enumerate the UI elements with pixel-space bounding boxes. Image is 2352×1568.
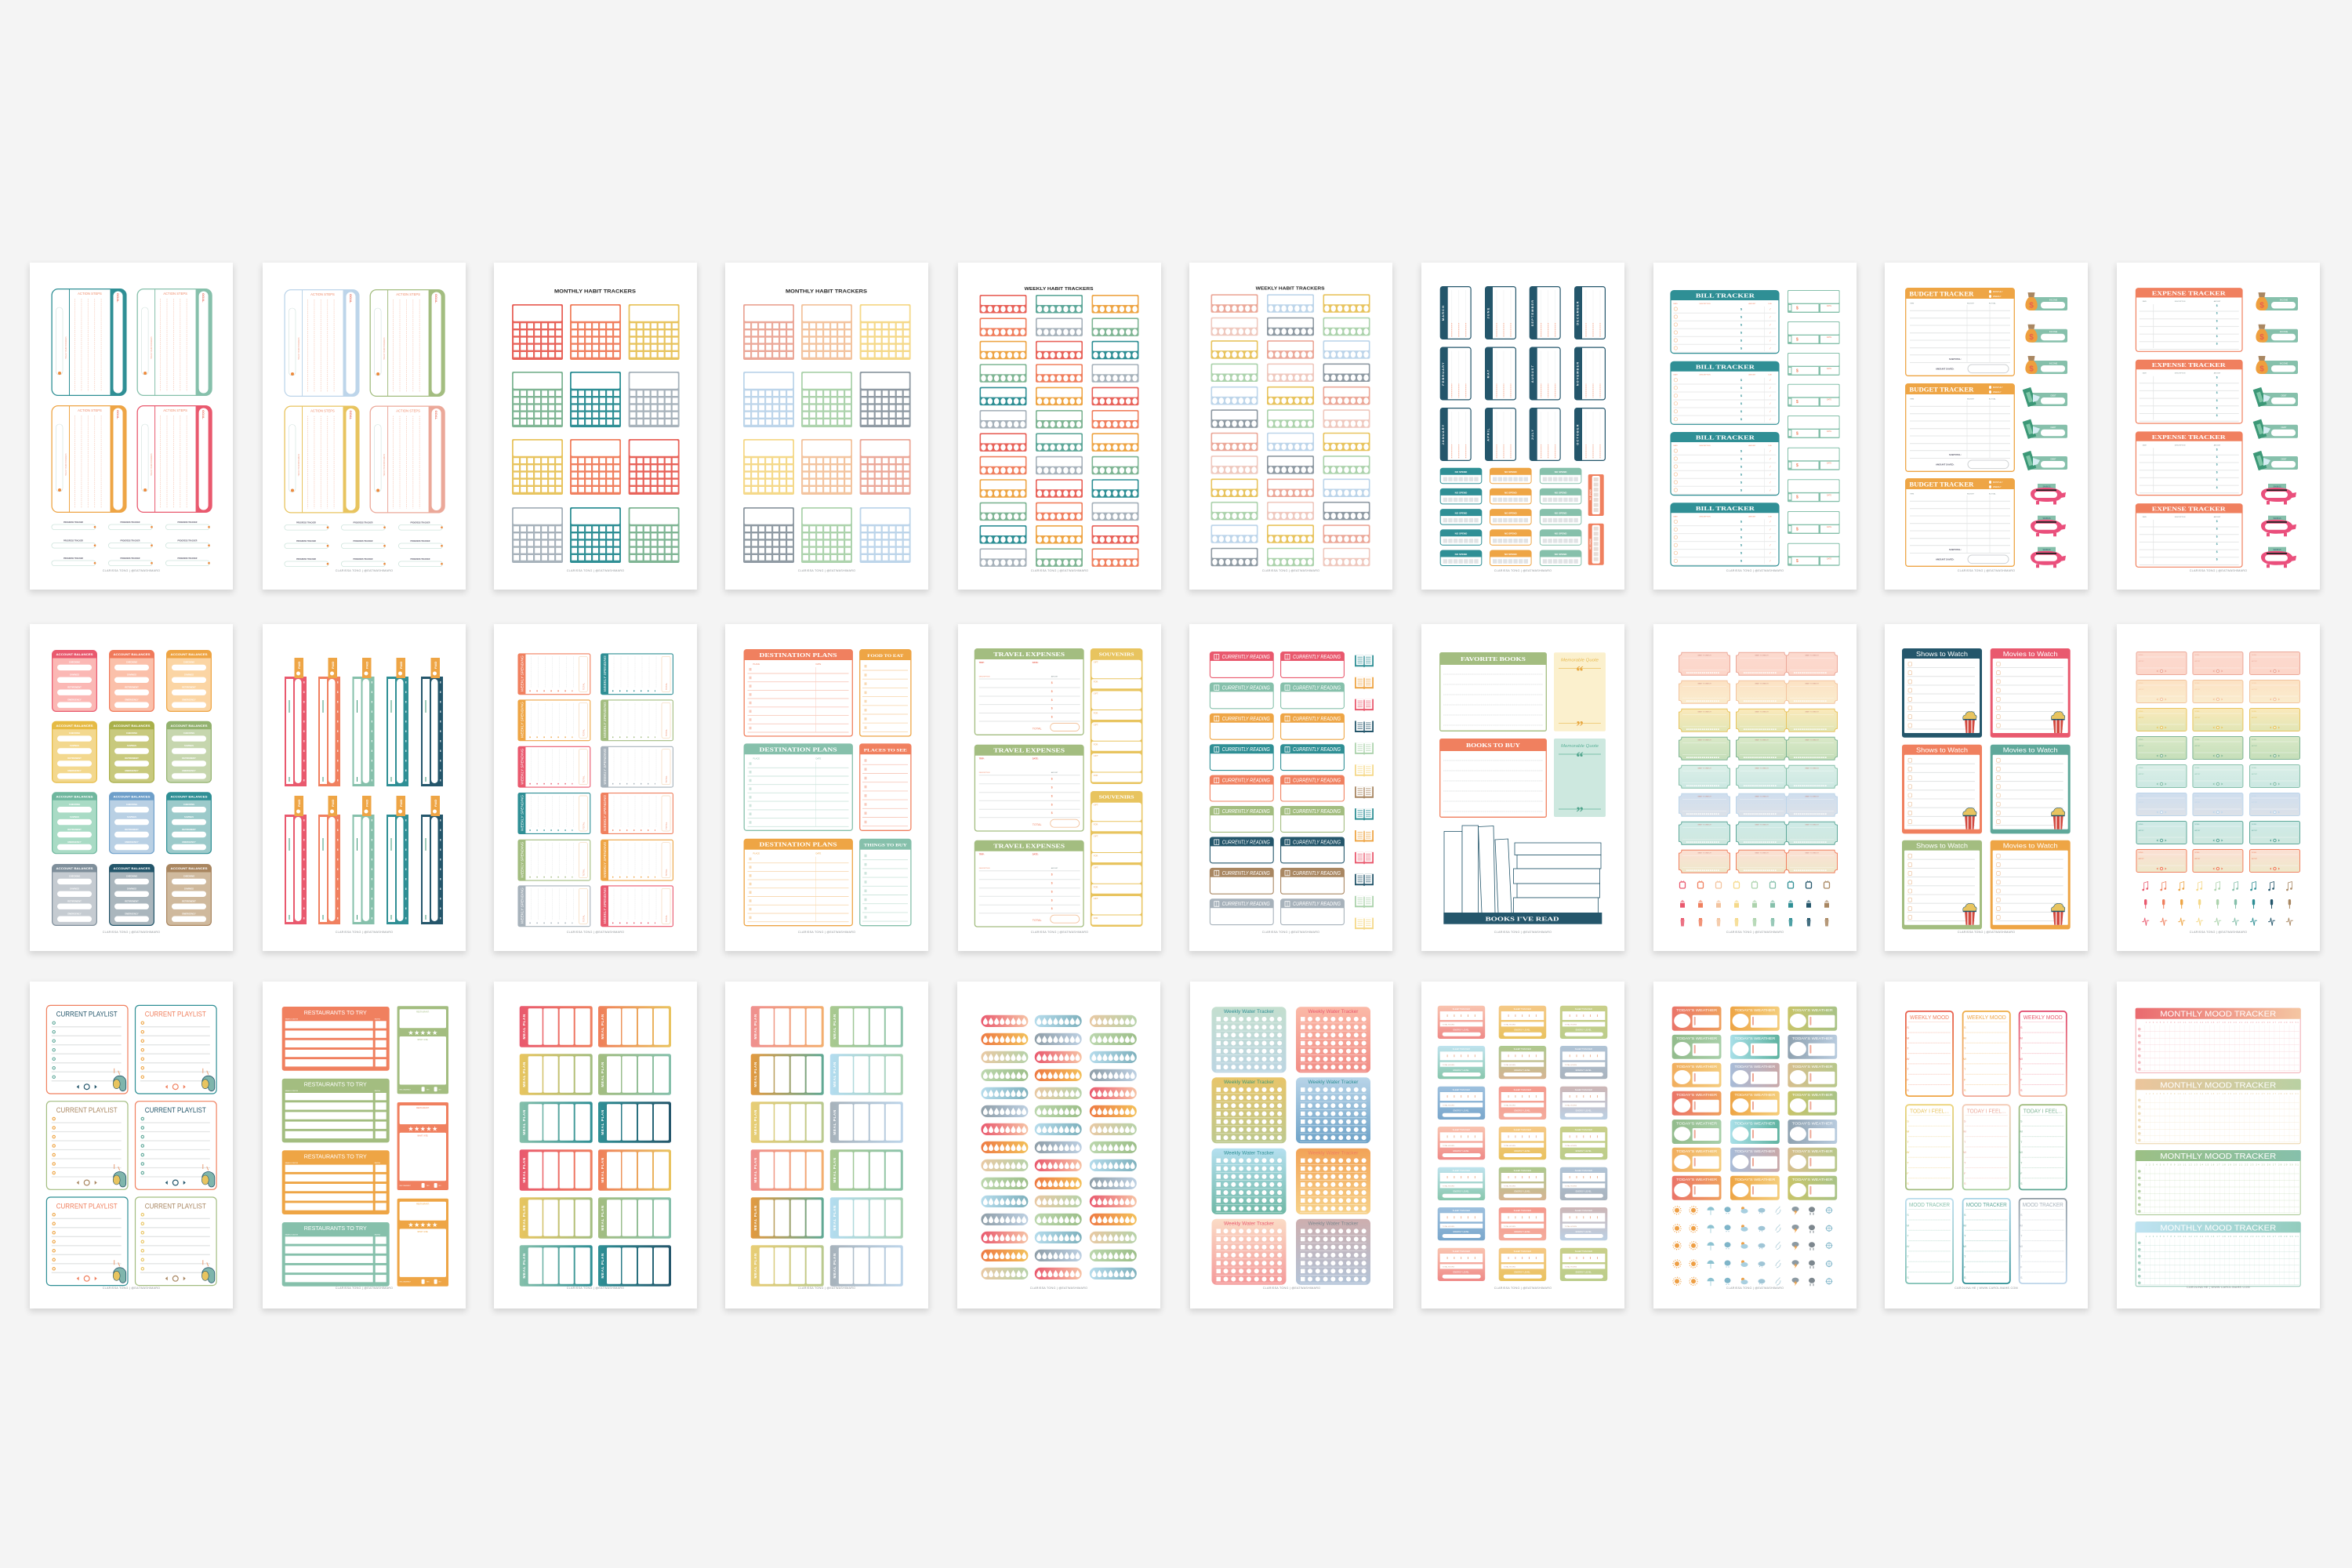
microphone icons	[2144, 899, 2291, 909]
expense tracker cards	[2136, 289, 2242, 567]
books i've read banner	[1443, 913, 1602, 924]
mood tracker cards: MOOD TRACKER	[2023, 1203, 2063, 1208]
footer credit	[1726, 569, 1784, 572]
page: weekly habit trackers, pastel	[1189, 263, 1393, 593]
books to buy list: BOOKS TO BUY	[1466, 742, 1521, 749]
page: weekly habit trackers, bright	[957, 263, 1162, 593]
page: weekly water trackers	[1189, 982, 1394, 1312]
progress trackers	[52, 521, 210, 566]
list: food to eat	[860, 650, 911, 736]
icon stickers: money bag, cash, piggy bank	[2253, 292, 2298, 568]
weather cards	[1672, 1007, 1837, 1200]
footer credit	[1263, 1287, 1320, 1290]
list: places to see	[860, 744, 911, 830]
water drop pills	[981, 1015, 1137, 1279]
month cards: JANUARY	[1442, 424, 1445, 445]
quote card yellow: Memorable Quote	[1561, 658, 1599, 662]
quote card mint: ”	[1576, 804, 1584, 821]
month cards: SEPTEMBER	[1531, 299, 1534, 326]
month cards: FEBRUARY	[1442, 361, 1445, 386]
goal cards	[285, 290, 445, 513]
footer credit	[103, 931, 160, 934]
footer credit	[1262, 931, 1319, 934]
weekly spending cards	[518, 654, 673, 927]
music note icons	[2142, 881, 2292, 891]
footer credit	[1494, 931, 1552, 934]
page: goal action steps, pastel colours	[262, 263, 466, 593]
page: destination plans	[724, 624, 929, 954]
ticket stickers	[1679, 652, 1838, 873]
bookmark strips	[285, 658, 443, 924]
quote card mint	[1554, 739, 1606, 821]
page: budget trackers	[1884, 263, 2089, 593]
book icons	[1355, 655, 1374, 930]
footer credit	[798, 931, 855, 934]
mood tracker cards: MOOD TRACKER	[1966, 1203, 2007, 1208]
footer credit	[567, 569, 624, 572]
weekly mood cards: WEEKLY MOOD	[1967, 1015, 2006, 1021]
heading: MONTHLY HABIT TRACKERS	[786, 290, 867, 295]
page: monthly habit trackers, pastel	[724, 263, 929, 593]
page: sleep trackers	[1421, 982, 1625, 1312]
page: current playlist	[29, 982, 234, 1312]
weekly mood cards	[1906, 1011, 2067, 1096]
water tracker cards	[1212, 1007, 1370, 1285]
habit grids	[743, 304, 911, 563]
footer credit	[336, 931, 393, 934]
footer credit	[567, 931, 624, 934]
today i feel cards: TODAY I FEEL...	[1967, 1109, 2006, 1114]
account balance cards	[53, 651, 211, 925]
page: bill trackers	[1653, 263, 1857, 593]
page: monthly habit trackers, bright	[493, 263, 698, 593]
currently reading stickers	[1210, 652, 1344, 925]
vertical no spend strips	[1588, 474, 1604, 565]
footer credit	[2190, 931, 2247, 934]
page: monthly mood	[2116, 982, 2321, 1312]
page: books	[1421, 624, 1625, 954]
month cards: JUNE	[1486, 307, 1490, 318]
page: shows and movies to watch	[1884, 624, 2089, 954]
month cards: OCTOBER	[1576, 423, 1579, 445]
list: things to buy: THINGS TO BUY	[864, 844, 907, 848]
habit grids	[512, 304, 680, 563]
page: meal plans, pastel	[724, 982, 929, 1312]
heading: WEEKLY HABIT TRACKERS	[1025, 287, 1094, 292]
footer credit	[798, 1287, 855, 1290]
destination plan cards	[744, 650, 852, 926]
heading: WEEKLY HABIT TRACKERS	[1256, 287, 1325, 292]
list: places to see: PLACES TO SEE	[864, 748, 907, 753]
footer credit	[1031, 931, 1088, 934]
month cards: NOVEMBER	[1576, 361, 1579, 386]
tv icons	[1679, 881, 1830, 888]
footer credit	[1958, 931, 2015, 934]
footer credit	[1494, 1287, 1552, 1290]
goal cards	[52, 289, 212, 512]
favorite books list: FAVORITE BOOKS	[1461, 655, 1526, 662]
footer credit	[103, 1287, 160, 1290]
month cards	[1440, 287, 1605, 460]
list: food to eat: FOOD TO EAT	[867, 654, 904, 659]
mood tracker cards	[1906, 1199, 2067, 1283]
weather icons	[1673, 1207, 1833, 1286]
playlist cards	[46, 1005, 216, 1286]
today i feel cards: TODAY I FEEL...	[2024, 1109, 2063, 1114]
drink cup icons	[1681, 918, 1828, 927]
page: expense trackers	[2116, 263, 2321, 593]
souvenir strips	[1091, 648, 1142, 927]
restaurant list cards	[282, 1007, 390, 1287]
restaurant review stickers	[397, 1006, 448, 1287]
page: today's weather	[1653, 982, 1857, 1312]
no spend stickers	[1440, 468, 1581, 566]
song cards	[2136, 652, 2300, 872]
footer credit	[1958, 569, 2015, 572]
page: water drop stickers	[956, 982, 1161, 1312]
bill tracker cards	[1671, 291, 1779, 566]
habit strips	[980, 295, 1138, 567]
footer credit	[1030, 1287, 1087, 1290]
quote card yellow: “	[1576, 663, 1584, 680]
month cards: MAY	[1486, 369, 1490, 378]
favorite books list	[1440, 653, 1546, 731]
footer credit	[336, 569, 393, 572]
page: currently reading	[1189, 624, 1393, 954]
footer credit	[103, 569, 160, 572]
books i've read banner: BOOKS I'VE READ	[1486, 916, 1559, 922]
progress trackers	[285, 522, 443, 567]
quote card mint: “	[1576, 750, 1584, 766]
clapper icons	[1680, 900, 1829, 908]
sound wave icons	[2142, 918, 2293, 926]
mood tracker cards: MOOD TRACKER	[1909, 1203, 1950, 1208]
monthly mood tracker grids	[2136, 1008, 2301, 1287]
icon stickers: money bag, cash, piggy bank	[2023, 292, 2067, 568]
watch list cards	[1902, 648, 2071, 929]
page: want to watch tickets	[1653, 624, 1857, 954]
list: things to buy	[860, 839, 911, 926]
page: goal action steps, bright colours	[29, 263, 234, 593]
page: account balances	[29, 624, 234, 954]
footer credit	[1494, 569, 1552, 572]
page: restaurants to try	[262, 982, 466, 1312]
page: monthly no-spend trackers	[1421, 263, 1625, 593]
sleep tracker cards	[1438, 1006, 1607, 1281]
quote card yellow	[1554, 652, 1606, 735]
page: weekly spending	[493, 624, 698, 954]
quote card mint: Memorable Quote	[1561, 744, 1599, 749]
page: song stickers	[2116, 624, 2321, 954]
today i feel cards	[1906, 1105, 2067, 1189]
footer credit	[336, 1287, 393, 1290]
budget tracker cards	[1906, 289, 2014, 566]
weekly mood cards: WEEKLY MOOD	[1910, 1015, 1949, 1021]
month cards: DECEMBER	[1576, 300, 1579, 325]
footer credit	[1726, 1287, 1784, 1290]
footer credit	[1031, 569, 1088, 572]
month cards: AUGUST	[1531, 365, 1534, 383]
page: travel expenses	[957, 624, 1162, 954]
page: weekly mood	[1884, 982, 2089, 1312]
travel expense cards	[975, 649, 1083, 927]
habit strips	[1210, 294, 1370, 566]
today i feel cards: TODAY I FEEL...	[1910, 1109, 1949, 1114]
footer credit	[1726, 931, 1784, 934]
page: meal plans, bright	[493, 982, 698, 1312]
books to buy list	[1440, 739, 1546, 817]
meal plan cards	[520, 1006, 671, 1287]
stacked books illustration	[1444, 826, 1601, 913]
meal plan cards	[751, 1006, 903, 1287]
month cards: APRIL	[1486, 427, 1490, 441]
side bill stickers	[1788, 290, 1840, 566]
heading: MONTHLY HABIT TRACKERS	[554, 290, 636, 295]
quote card yellow: ”	[1576, 718, 1584, 735]
footer credit	[2187, 1286, 2250, 1289]
footer credit	[1955, 1287, 2018, 1290]
footer credit	[567, 1287, 624, 1290]
footer credit	[2190, 569, 2247, 572]
page: paid bookmarks	[262, 624, 466, 954]
month cards: MARCH	[1442, 305, 1445, 321]
month cards: JULY	[1531, 429, 1534, 440]
weekly mood cards: WEEKLY MOOD	[2024, 1015, 2063, 1021]
footer credit	[798, 569, 855, 572]
footer credit	[1262, 569, 1319, 572]
